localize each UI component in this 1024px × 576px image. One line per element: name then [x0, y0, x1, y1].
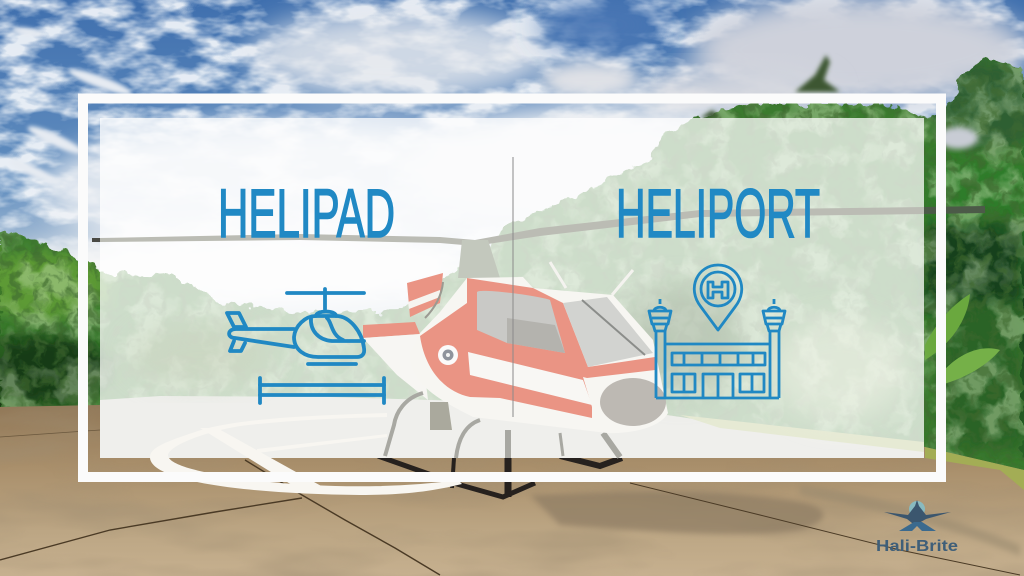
rotor head [458, 240, 500, 278]
logo: Hali-Brite [876, 500, 958, 555]
white stripe [468, 352, 592, 405]
right control tower [763, 299, 785, 398]
landing circle markings [150, 413, 462, 495]
banana leaves [925, 294, 970, 360]
icon: heliport terminal with towers and location pin [649, 265, 785, 398]
faded foliage shading [620, 285, 740, 395]
tree edge fill right [1010, 80, 1024, 470]
roundel [438, 345, 458, 365]
location pin [694, 265, 742, 330]
windshield [563, 297, 653, 367]
helicopter [92, 206, 985, 458]
white frame [83, 98, 941, 477]
heading: heliport: HELIPORT [616, 175, 820, 252]
treetop branches above the frame [700, 55, 840, 118]
heading: helipad: HELIPAD [218, 175, 395, 252]
trees [0, 57, 1024, 470]
cabin door window [477, 291, 565, 353]
concrete ground [0, 400, 1024, 576]
helicopter shadow [530, 492, 823, 534]
crew on the pad [430, 402, 452, 430]
translucent white panel [100, 118, 924, 458]
terminal building [656, 344, 779, 398]
antennas [550, 262, 633, 295]
struts [385, 393, 620, 458]
tail fin [407, 273, 443, 317]
sky gap between trees [938, 127, 978, 149]
logo glow [909, 501, 925, 517]
icon: helicopter over landing pad [227, 289, 384, 403]
fuselage [410, 277, 668, 433]
grass verge [925, 447, 1024, 490]
red livery [420, 278, 655, 418]
nose sensor [600, 378, 666, 426]
clouds [0, 0, 1024, 310]
sky [0, 0, 1024, 420]
main rotor [92, 206, 985, 246]
left control tower [649, 299, 671, 398]
logo plane [884, 500, 951, 523]
tail boom [363, 322, 420, 338]
cracks [0, 430, 1020, 575]
logo runway [899, 522, 936, 531]
logo wordmark: Hali-Brite [876, 538, 958, 555]
divider between columns [512, 157, 514, 417]
tree edge fill left [0, 245, 14, 410]
faded pad surface [100, 396, 924, 458]
faded grass verge [680, 415, 924, 452]
lower skids outside the panel [378, 455, 622, 497]
